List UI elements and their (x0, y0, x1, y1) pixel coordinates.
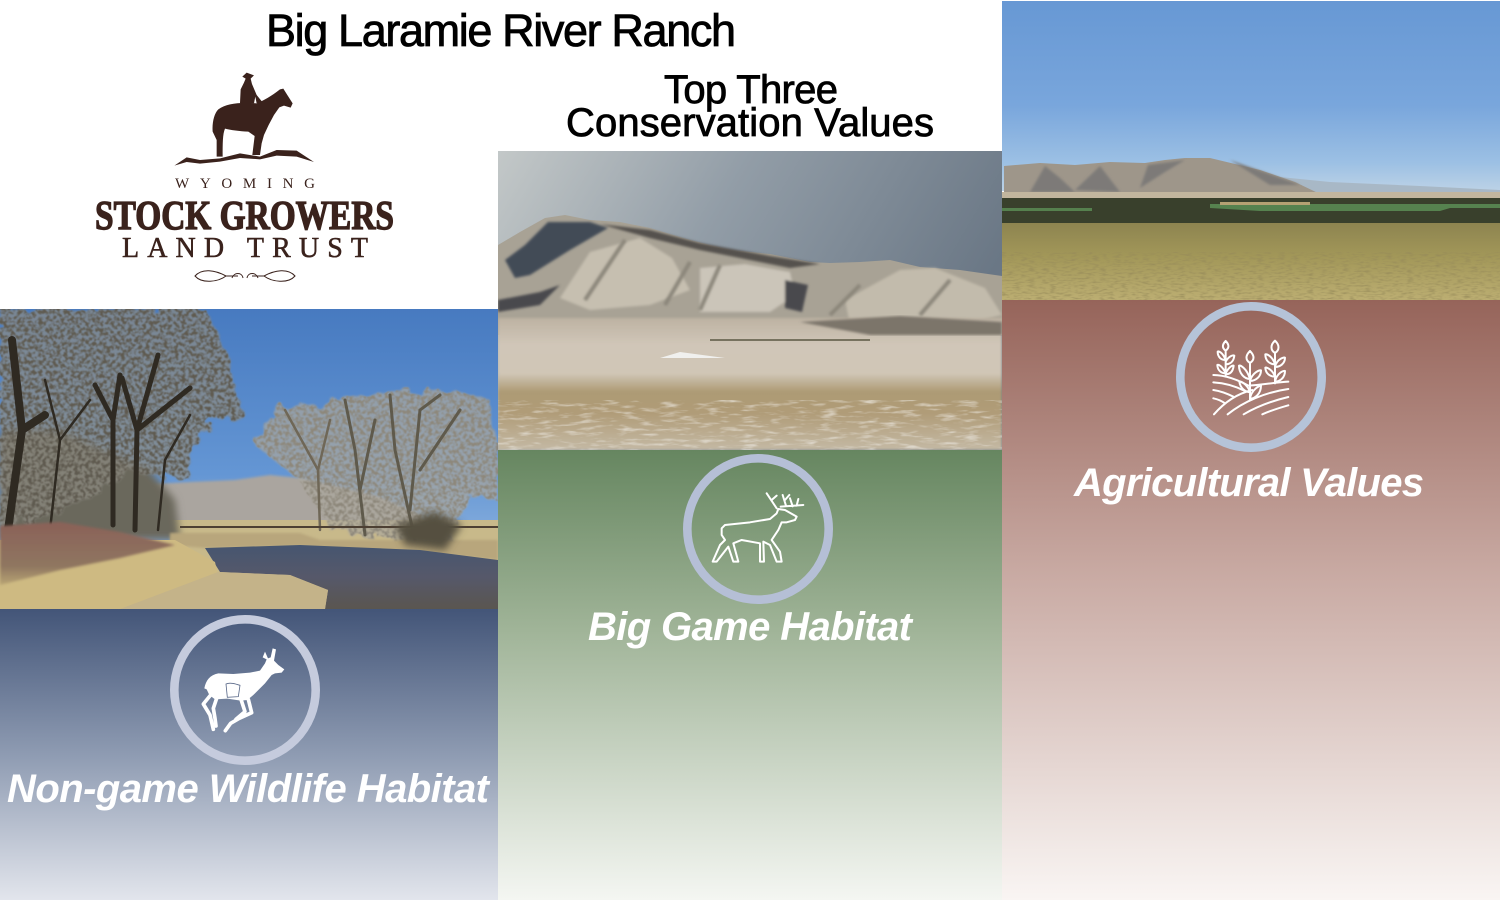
photo: river and cottonwood trees (0, 309, 498, 610)
logo: Wyoming Stock Growers Land Trust (95, 73, 394, 281)
panel: big game gradient (498, 450, 1002, 900)
photo: snowy mountain under storm clouds (498, 151, 1002, 450)
logo text: Wyoming: WYOMING (175, 176, 315, 192)
label: Big Game Habitat (588, 605, 914, 649)
label: Non-game Wildlife Habitat (7, 767, 491, 811)
heading: top three conservation values (566, 68, 934, 145)
panel: non-game wildlife gradient (0, 609, 498, 900)
photo: prairie with distant mountain (1002, 1, 1500, 300)
icon: elk (713, 493, 803, 562)
icon ring (1180, 306, 1322, 448)
heading: top three conservation values: Top Three (664, 68, 838, 112)
logo text: Stock Growers: STOCK GROWERS (95, 192, 394, 238)
panel: agricultural gradient (1002, 300, 1500, 900)
panel content: big game habitat (588, 458, 914, 649)
label: Agricultural Values (1073, 461, 1424, 505)
icon ring (687, 458, 829, 600)
panel content: agricultural values (1073, 306, 1424, 505)
icon: horse and rider silhouette (174, 73, 314, 166)
logo text: Land Trust: LAND TRUST (122, 233, 368, 264)
logo ornament (195, 271, 295, 281)
icon: crops on rolling fields (1213, 341, 1288, 414)
title: Big Laramie River Ranch (266, 5, 736, 56)
icon ring (174, 619, 316, 761)
panel content: non-game wildlife habitat (7, 619, 491, 811)
icon: pronghorn (203, 648, 284, 731)
heading: top three conservation values: Conservation Values (566, 101, 934, 145)
